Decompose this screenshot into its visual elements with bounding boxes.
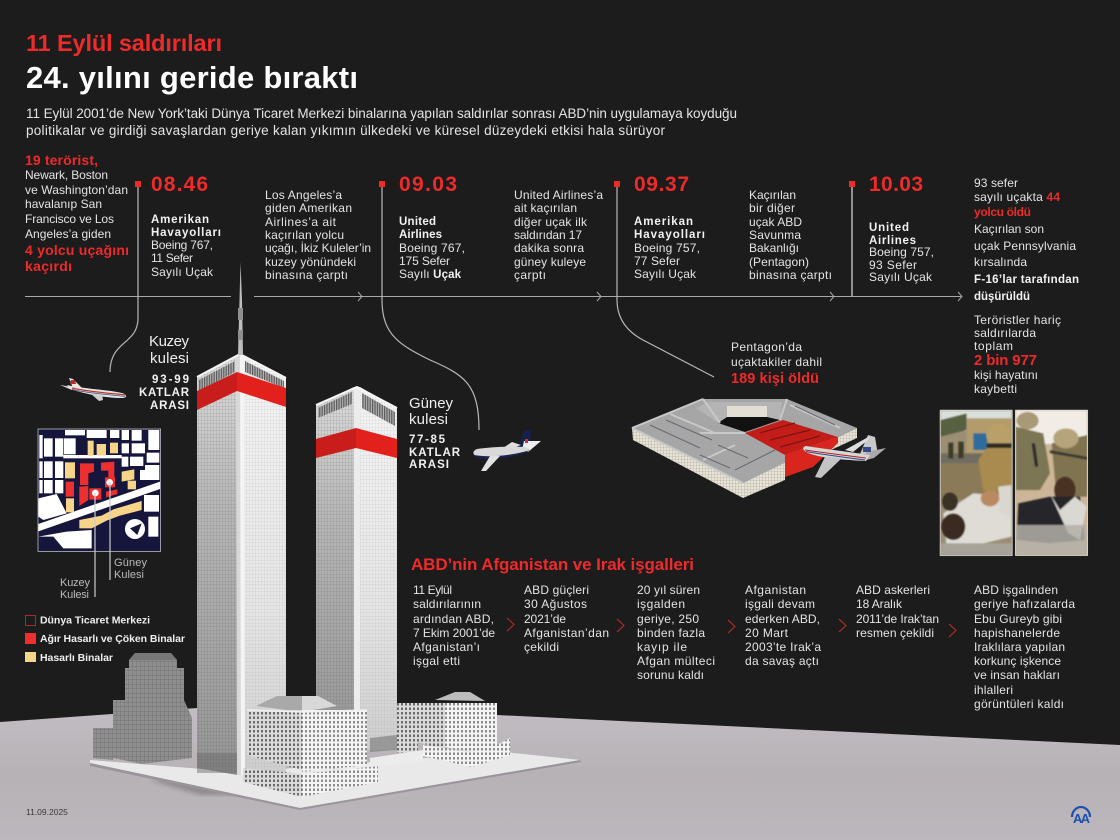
- text: second impact: ait kaçırılan: [514, 201, 577, 215]
- text: pentagon impact: (Pentagon): [749, 255, 809, 269]
- timeline axis with arrows: [25, 184, 962, 430]
- plaza: [90, 752, 581, 810]
- text: second impact: [514, 188, 603, 282]
- text: pentagon impact: binasına çarptı: [749, 268, 832, 282]
- occupation column 2: 2021’de: [524, 612, 566, 626]
- text: hijackers intro: Newark, Boston: [25, 168, 108, 182]
- event 09.37: Boeing 757,: [634, 241, 700, 255]
- text: hijackers intro: [25, 152, 129, 274]
- south tower label: KATLAR: [409, 447, 461, 459]
- text: hijackers intro: Angeles’a giden: [25, 227, 111, 241]
- map callout labels: Kulesi: [114, 569, 144, 581]
- occupation column 6: ABD işgalinden: [974, 583, 1058, 597]
- event 08.46: Havayolları: [151, 227, 221, 239]
- text: pentagon impact: bir diğer: [749, 201, 795, 215]
- text: flight 93 and casualties: Kaçırılan son: [974, 222, 1044, 236]
- occupation column 1: [413, 583, 495, 668]
- text: first impact: Airlines’a ait: [265, 215, 337, 229]
- event 08.46: [151, 173, 221, 279]
- text: flight 93 and casualties: kişi hayatını: [974, 368, 1038, 382]
- text: flight 93 and casualties: toplam: [974, 339, 1013, 353]
- skyline illustration: [90, 262, 581, 810]
- occupation column 2: çekildi: [524, 640, 559, 654]
- occupation column 6: ve insan hakları: [974, 668, 1060, 682]
- text: pentagon impact: Kaçırılan: [749, 188, 796, 202]
- occupation column 5: 18 Aralık: [856, 597, 903, 611]
- event 09.37: 77 Sefer: [634, 254, 680, 268]
- walkway: [370, 750, 423, 767]
- date: 11.09.2025: [26, 807, 68, 817]
- south tower: [316, 387, 397, 752]
- event 10.03: Sayılı Uçak: [869, 270, 933, 284]
- occupation column 2: [524, 583, 609, 654]
- text: second impact: dakika sonra: [514, 241, 584, 255]
- event 08.46: Boeing 767,: [151, 238, 213, 252]
- text: first impact: kaçırılan yolcu: [265, 228, 344, 242]
- text: flight 93 and casualties: Teröristler hariç: [974, 313, 1061, 327]
- occupation column 4: 2003’te Irak’a: [745, 640, 821, 654]
- icon: AA logo: AA: [1073, 811, 1091, 826]
- event 08.46: Amerikan: [151, 214, 209, 226]
- south tower label: kulesi: [409, 411, 448, 428]
- title: 11 Eylül saldırıları: [26, 30, 222, 56]
- occupation column 6: görüntüleri kaldı: [974, 697, 1064, 711]
- occupation column 6: korkunç işkence: [974, 654, 1061, 668]
- intro paragraph: politikalar ve girdiği savaşlardan geriye kalan yıkımın ülkedeki ve küresel düzeydeki etkisi hala sürüyor: [26, 123, 666, 138]
- event 09.03: United: [399, 216, 436, 228]
- pentagon casualties text: 189 kişi öldü: [731, 371, 819, 387]
- pentagon casualties text: Pentagon’da: [731, 340, 802, 354]
- occupation column 3: sorunu kaldı: [637, 668, 704, 682]
- text: second impact: güney kuleye: [514, 255, 586, 269]
- occupation column 2: 30 Ağustos: [524, 597, 587, 611]
- text: flight 93 and casualties: kaybetti: [974, 382, 1017, 396]
- occupation column 3: binden fazla: [637, 626, 705, 640]
- event 09.03: [399, 173, 465, 281]
- event 08.46: 11 Sefer: [151, 251, 193, 265]
- occupation column 5: [856, 583, 939, 640]
- map callout labels: Kulesi: [60, 589, 89, 601]
- text: first impact: kuzey yönündeki: [265, 255, 356, 269]
- text: flight 93 and casualties: kırsalında: [974, 255, 1027, 269]
- occupation column 1: 11 Eylül: [413, 583, 452, 597]
- occupation column 5: 2011’de Irak’tan: [856, 612, 939, 626]
- occupation column 3: işgalden: [637, 597, 685, 611]
- text: first impact: uçağı, İkiz Kuleler’in: [265, 241, 371, 255]
- event 10.03: 93 Sefer: [869, 258, 917, 272]
- occupation column 2: ABD güçleri: [524, 583, 589, 597]
- legend: Dünya Ticaret Merkezi: [40, 614, 150, 626]
- legend: [25, 614, 185, 664]
- south tower label: [409, 395, 461, 471]
- text: second impact: çarptı: [514, 268, 546, 282]
- icon: plane united south: [473, 430, 541, 471]
- front building: [243, 696, 378, 797]
- occupation column 4: işgali devam: [745, 597, 815, 611]
- icon: plane american north: [60, 378, 126, 401]
- south tower label: 77-85: [409, 434, 446, 446]
- text: second impact: diğer uçak ilk: [514, 215, 588, 229]
- map callout labels: [60, 482, 148, 601]
- occupation column 6: geriye hafızalarda: [974, 597, 1075, 611]
- antenna: [238, 262, 243, 355]
- legend: Ağır Hasarlı ve Çöken Binalar: [40, 633, 185, 645]
- north tower label: kulesi: [150, 350, 189, 367]
- text: first impact: giden Amerikan: [265, 201, 352, 215]
- text: hijackers intro: kaçırdı: [25, 258, 72, 274]
- intro paragraph: 11 Eylül 2001’de New York’taki Dünya Ticaret Merkezi binalarına yapılan saldırılar sonrası ABD’nin uygulamaya koyduğu: [26, 106, 737, 121]
- event 10.03: 10.03: [869, 173, 923, 196]
- event 09.03: 175 Sefer: [399, 254, 450, 268]
- text: second impact: United Airlines’a: [514, 188, 603, 202]
- occupation column 4: da savaş açtı: [745, 654, 819, 668]
- map callout labels: Kuzey: [60, 577, 90, 589]
- event 09.03: 09.03: [399, 173, 457, 196]
- text: pentagon impact: Savunma: [749, 228, 801, 242]
- pentagon casualties text: uçaktakiler dahil: [731, 355, 822, 369]
- occupation column 6: Ebu Gureyb gibi: [974, 612, 1062, 626]
- title: [26, 30, 358, 95]
- event 10.03: Airlines: [869, 235, 916, 247]
- pentagon illustration: [632, 399, 857, 498]
- back left building: [93, 653, 192, 764]
- text: flight 93 and casualties: sayılı uçakta 44: [974, 190, 1060, 204]
- occupation column 1: Afganistan’ı: [413, 640, 480, 654]
- south tower label: Güney: [409, 395, 454, 412]
- occupation column 1: saldırılarının: [413, 597, 481, 611]
- north tower: [197, 354, 286, 780]
- event 09.03: Airlines: [399, 229, 442, 241]
- event 09.37: 09.37: [634, 173, 689, 196]
- legend: Hasarlı Binalar: [40, 652, 113, 664]
- text: flight 93 and casualties: yolcu öldü: [974, 205, 1031, 219]
- event 09.37: [634, 173, 705, 281]
- event 09.03: Sayılı Uçak: [399, 267, 462, 281]
- occupation column 6: Iraklılara yapılan: [974, 640, 1065, 654]
- event 09.37: Sayılı Uçak: [634, 267, 697, 281]
- event 08.46: 08.46: [151, 173, 208, 196]
- text: flight 93 and casualties: 2 bin 977: [974, 352, 1037, 369]
- chevron arrows between columns: [507, 618, 956, 637]
- text: hijackers intro: ve Washington’dan: [25, 183, 128, 197]
- event 10.03: United: [869, 222, 909, 234]
- text: pentagon impact: [749, 188, 832, 282]
- occupation column 3: Afgan mülteci: [637, 654, 715, 668]
- north tower label: 93-99: [152, 374, 189, 386]
- occupation column 3: 20 yıl süren: [637, 583, 700, 597]
- text: flight 93 and casualties: F-16’lar tarafından: [974, 274, 1079, 286]
- pentagon casualties text: [731, 340, 822, 387]
- text: hijackers intro: havalanıp San: [25, 197, 102, 211]
- text: first impact: Los Angeles’a: [265, 188, 342, 202]
- occupation column 4: [745, 583, 821, 668]
- text: first impact: binasına çarptı: [265, 268, 348, 282]
- north tower label: Kuzey: [149, 333, 190, 350]
- occupation column 4: ederken ABD,: [745, 612, 820, 626]
- text: first impact: [265, 188, 371, 282]
- timeline markers: [135, 181, 855, 187]
- occupation column 1: 7 Ekim 2001’de: [413, 626, 495, 640]
- occupation column 1: işgal etti: [413, 654, 460, 668]
- occupation column 6: ihlalleri: [974, 683, 1013, 697]
- event 08.46: Sayılı Uçak: [151, 265, 214, 279]
- text: pentagon impact: Bakanlığı: [749, 241, 799, 255]
- occupation column 2: Afganistan’dan: [524, 626, 609, 640]
- event 09.03: Boeing 767,: [399, 241, 465, 255]
- text: flight 93 and casualties: 93 sefer: [974, 176, 1018, 190]
- shadow on ground: [150, 775, 260, 795]
- occupation column 6: [974, 583, 1075, 711]
- ground plane: [0, 708, 1120, 840]
- intro paragraph: [26, 106, 737, 138]
- text: pentagon impact: uçak ABD: [749, 215, 802, 229]
- title: 24. yılını geride bıraktı: [26, 60, 358, 95]
- map callout labels: Güney: [114, 557, 148, 569]
- text: hijackers intro: 4 yolcu uçağını: [25, 242, 129, 258]
- occupation column 6: hapishanelerde: [974, 626, 1060, 640]
- icon: site map of World Trade Center: [38, 429, 161, 551]
- text: flight 93 and casualties: saldırılarda: [974, 326, 1036, 340]
- north tower label: ARASI: [150, 400, 189, 412]
- occupation column 3: geriye, 250: [637, 612, 699, 626]
- occupation column 3: [637, 583, 715, 682]
- text: second impact: saldırıdan 17: [514, 228, 582, 242]
- text: hijackers intro: Francisco ve Los: [25, 212, 114, 226]
- north tower label: [139, 333, 190, 412]
- heading: occupations: ABD’nin Afganistan ve Irak işgalleri: [411, 555, 694, 574]
- occupation column 4: Afganistan: [745, 583, 806, 597]
- event 09.37: Amerikan: [634, 216, 693, 228]
- photos: [940, 410, 1088, 556]
- north tower label: KATLAR: [139, 387, 190, 399]
- icon: plane american pentagon: [803, 435, 886, 478]
- text: hijackers intro: 19 terörist,: [25, 152, 98, 168]
- occupation column 1: ardından ABD,: [413, 612, 494, 626]
- right building: [418, 692, 510, 767]
- occupation column 5: resmen çekildi: [856, 626, 934, 640]
- text: flight 93 and casualties: düşürüldü: [974, 291, 1030, 303]
- building behind right: [397, 703, 418, 753]
- text: flight 93 and casualties: [974, 176, 1079, 396]
- south tower label: ARASI: [409, 459, 449, 471]
- event 10.03: Boeing 757,: [869, 245, 934, 259]
- text: flight 93 and casualties: uçak Pennsylvania: [974, 239, 1076, 253]
- event 09.37: Havayolları: [634, 229, 705, 241]
- occupation column 4: 20 Mart: [745, 626, 789, 640]
- occupation column 3: kayıp ile: [637, 640, 687, 654]
- event 10.03: [869, 173, 934, 284]
- occupation column 5: ABD askerleri: [856, 583, 930, 597]
